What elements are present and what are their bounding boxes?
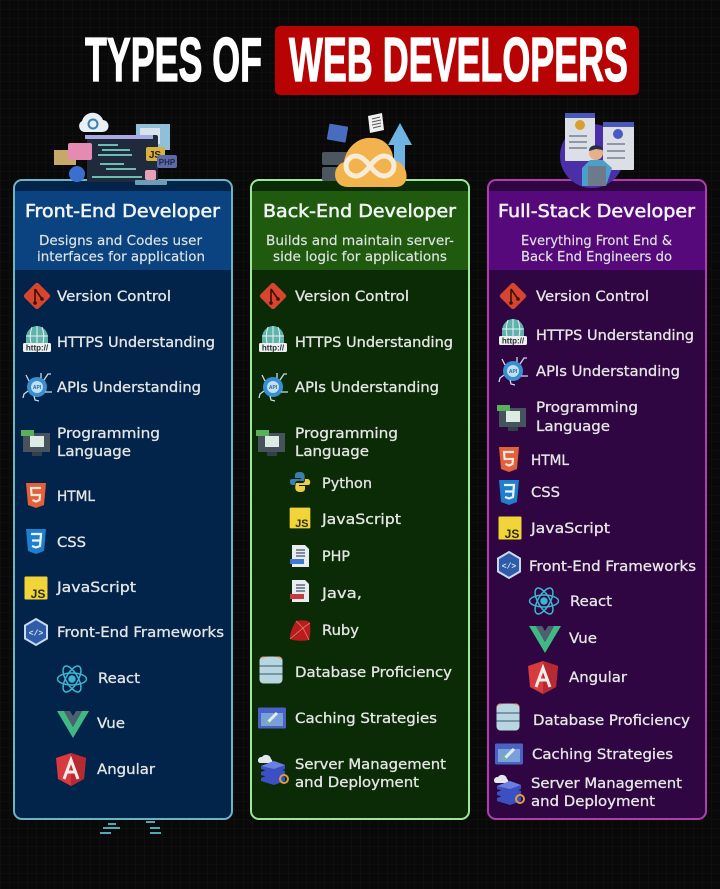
item: html: HTML — [531, 453, 569, 469]
title: TYPES OF — [85, 26, 262, 95]
description: back-end: Builds and maintain server- — [266, 234, 454, 249]
item: version control — [23, 282, 171, 310]
item: database proficiency: Database Proficiency — [533, 713, 690, 729]
item: programming language: Language — [295, 444, 369, 460]
item: ruby — [290, 620, 359, 641]
panel: front-end developer — [14, 180, 232, 819]
item: php — [290, 545, 350, 567]
item: angular — [56, 753, 155, 786]
item: server management and deployment: Server Management — [531, 776, 683, 792]
icon: front-end code cluster: JS — [149, 150, 161, 161]
item: https understanding — [23, 326, 215, 352]
item: react: React — [570, 594, 613, 610]
item: programming language: Programming — [536, 400, 638, 416]
item: html — [499, 447, 569, 472]
item: version control: Version Control — [295, 289, 409, 305]
header band: back-end — [252, 191, 468, 270]
item: css — [26, 529, 86, 554]
item: https understanding — [499, 319, 694, 345]
description: back-end: side logic for applications — [273, 250, 447, 265]
item: react: React — [98, 671, 141, 687]
heading: back-end developer: Back-End Developer — [263, 201, 457, 222]
item: php: PHP — [322, 549, 350, 565]
item: server management and deployment — [258, 755, 447, 791]
item: caching strategies: Caching Strategies — [295, 711, 437, 727]
item: front-end frameworks: Front-End Frameworks — [57, 625, 224, 641]
item: vue: Vue — [97, 716, 125, 732]
item: vue: Vue — [569, 631, 597, 647]
icon: back-end infinity cloud — [322, 113, 412, 187]
item: react — [58, 663, 141, 695]
description: front-end: Designs and Codes user — [39, 234, 203, 249]
item: version control — [259, 282, 409, 310]
item: programming language: Language — [57, 444, 131, 460]
item: https understanding: HTTPS Understanding — [57, 335, 215, 351]
header band: front-end — [15, 191, 231, 270]
item: javascript: JavaScript — [56, 580, 137, 596]
item: apis understanding: APIs Understanding — [536, 364, 680, 380]
icon: front-end code cluster: PHP — [159, 158, 176, 167]
item: java: Java, — [321, 586, 362, 602]
item: programming language — [497, 400, 638, 435]
heading: full-stack developer: Full-Stack Developer — [498, 201, 696, 222]
heading: front-end developer: Front-End Developer — [25, 201, 221, 222]
description: full-stack: Back End Engineers do — [521, 250, 672, 265]
item: database proficiency — [496, 703, 690, 730]
item: front-end frameworks: Front-End Frameworks — [529, 559, 696, 575]
item: angular — [528, 661, 627, 694]
item: java — [290, 580, 362, 602]
item: python — [290, 472, 372, 492]
description: back-end — [266, 234, 454, 265]
item: programming language — [256, 426, 398, 460]
item: https understanding: HTTPS Understanding — [295, 335, 453, 351]
item: angular: Angular — [569, 670, 627, 686]
item: html: HTML — [57, 489, 95, 505]
icon: front-end code cluster — [54, 113, 177, 185]
item: apis understanding — [259, 373, 439, 401]
item: javascript: JavaScript — [321, 512, 402, 528]
item: javascript — [24, 576, 137, 601]
icon: full-stack developer figure — [560, 113, 634, 188]
item: apis understanding: APIs Understanding — [57, 380, 201, 396]
item: vue — [57, 711, 125, 738]
item: css: CSS — [531, 485, 560, 501]
description: front-end — [37, 234, 205, 265]
item: database proficiency — [260, 656, 452, 684]
item: javascript: JavaScript — [530, 521, 611, 537]
item: https understanding — [259, 326, 453, 352]
item: javascript — [290, 508, 402, 530]
item: server management and deployment: and Deployment — [531, 794, 656, 810]
item: apis understanding: APIs Understanding — [295, 380, 439, 396]
panel: back-end developer — [251, 180, 469, 819]
bottom scan artifacts — [100, 821, 161, 834]
item: server management and deployment: and Deployment — [295, 775, 420, 791]
item: angular: Angular — [97, 762, 155, 778]
item: front-end frameworks — [498, 552, 696, 578]
item: version control: Version Control — [536, 289, 649, 305]
item: python: Python — [322, 476, 372, 492]
description: full-stack — [521, 234, 672, 265]
item: version control: Version Control — [57, 289, 171, 305]
item: apis understanding — [23, 373, 201, 401]
item: apis understanding — [499, 357, 680, 385]
description: front-end: interfaces for application — [37, 250, 205, 265]
item: javascript — [498, 516, 611, 541]
item: vue — [529, 626, 597, 653]
item: server management and deployment: Server Management — [295, 757, 447, 773]
item: caching strategies — [258, 708, 437, 728]
title — [85, 26, 639, 95]
item: programming language: Programming — [295, 426, 398, 442]
header band: full-stack — [489, 191, 705, 270]
panel: full-stack developer — [488, 180, 706, 819]
item: react — [530, 585, 613, 617]
item: https understanding: HTTPS Understanding — [536, 328, 694, 344]
item: database proficiency: Database Proficiency — [295, 665, 452, 681]
item: caching strategies: Caching Strategies — [532, 747, 673, 763]
item: css: CSS — [57, 535, 86, 551]
item: server management and deployment — [494, 775, 683, 810]
description: full-stack: Everything Front End & — [521, 234, 672, 249]
item: css — [499, 480, 560, 505]
item: caching strategies — [495, 744, 673, 764]
item: programming language — [21, 426, 160, 460]
item: html — [26, 483, 95, 508]
item: front-end frameworks — [25, 619, 224, 645]
item: programming language: Language — [536, 419, 610, 435]
item: programming language: Programming — [57, 426, 160, 442]
item: version control — [499, 282, 649, 310]
item: ruby: Ruby — [322, 623, 359, 639]
